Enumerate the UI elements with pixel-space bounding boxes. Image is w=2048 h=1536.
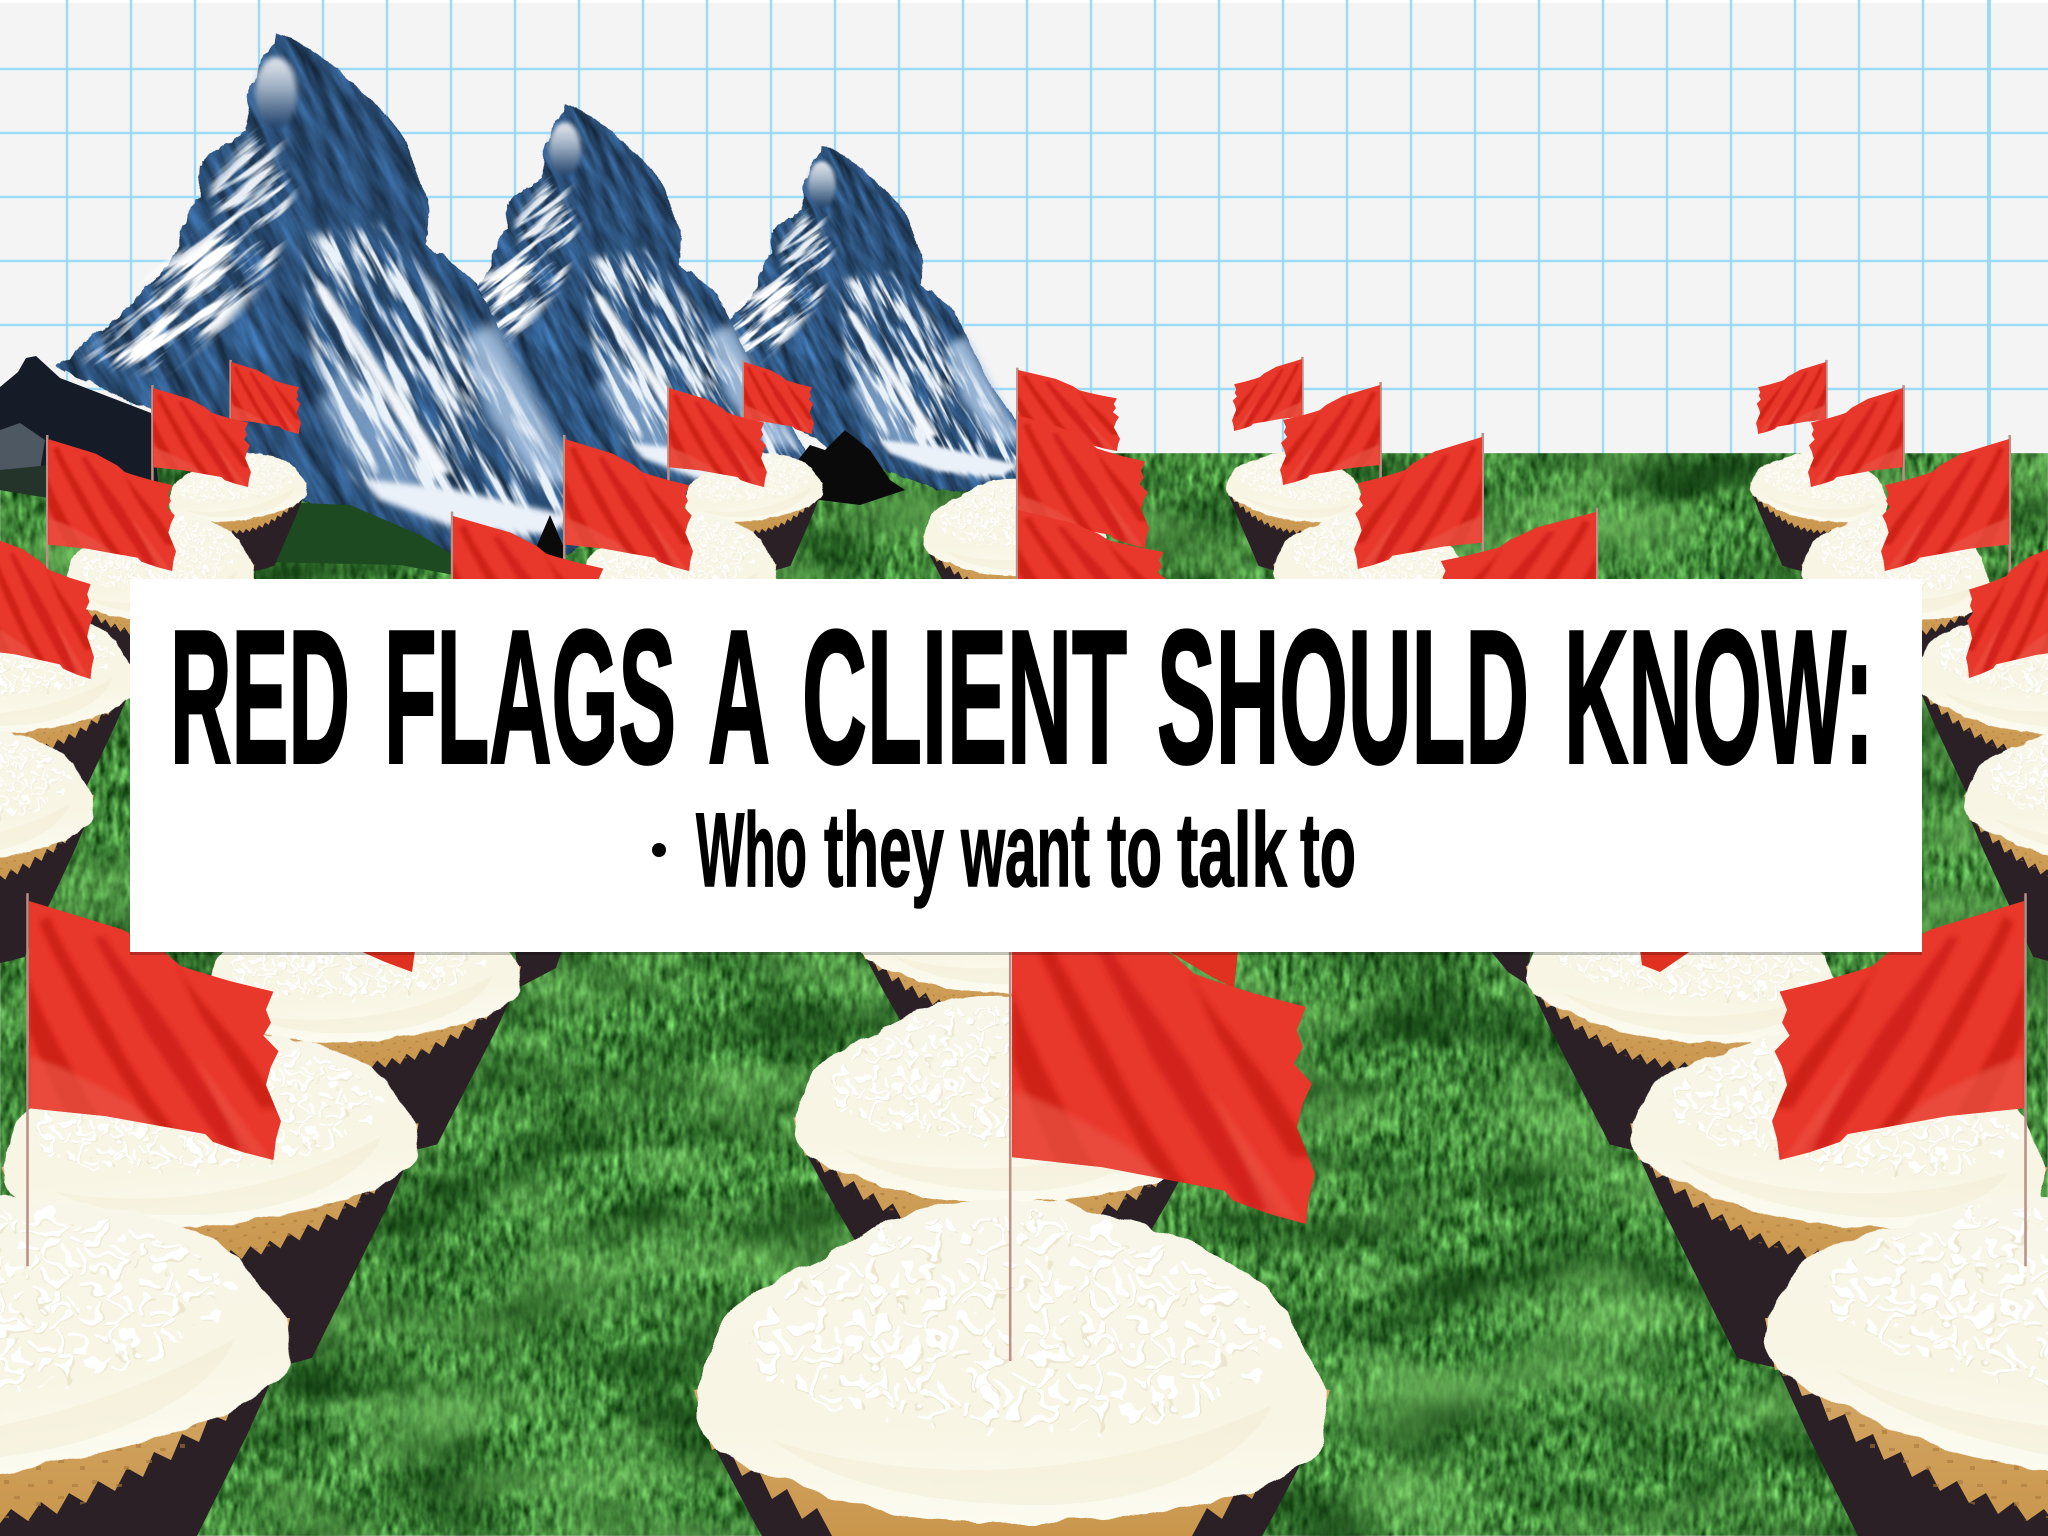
cupcake bbox=[574, 501, 790, 710]
bullet text bbox=[696, 792, 1356, 909]
red flag bbox=[668, 385, 767, 528]
bullet text: want bbox=[960, 792, 1090, 909]
cupcake cake: front bbox=[694, 1350, 1330, 1536]
grass field bbox=[0, 453, 2048, 1536]
red flag bbox=[0, 529, 94, 739]
cupcake bbox=[1739, 443, 1894, 582]
bullet text: they bbox=[824, 792, 944, 909]
heading: A bbox=[708, 592, 770, 804]
cupcake: third bbox=[1511, 879, 1850, 1169]
red flag bbox=[47, 435, 176, 625]
cupcake liner behind the box bbox=[1490, 950, 1530, 985]
flag scrap bbox=[1640, 950, 1692, 972]
red flag: front bbox=[27, 893, 281, 1266]
title panel bbox=[130, 579, 1922, 955]
cupcake base: front bbox=[1765, 1318, 2048, 1536]
cupcake bbox=[1788, 502, 1998, 710]
cupcake bbox=[1215, 443, 1370, 582]
cupcake: second bbox=[0, 1010, 443, 1396]
foreground left column of cupcakes bbox=[0, 879, 562, 1536]
cupcake bbox=[0, 596, 148, 840]
cupcake bbox=[163, 443, 318, 582]
cupcake bbox=[0, 715, 108, 978]
heading: RED bbox=[170, 592, 350, 804]
foreground centre column of cupcakes bbox=[694, 847, 1330, 1536]
cupcake bbox=[1260, 501, 1476, 710]
red flag bbox=[1354, 433, 1483, 623]
cupcake liner: front bbox=[700, 1420, 1324, 1536]
bullet text: to bbox=[1107, 792, 1162, 909]
cupcake: second bbox=[1606, 1010, 2048, 1396]
red flag bbox=[1017, 368, 1120, 484]
mountain: left peak bbox=[0, 0, 831, 788]
cupcakes and flags: back centre group bbox=[923, 368, 1168, 679]
cupcakes and flags: back centre-left group bbox=[452, 360, 834, 728]
cupcake bbox=[1902, 596, 2048, 840]
red flag bbox=[1808, 385, 1904, 528]
heading: SHOULD bbox=[1157, 592, 1529, 804]
heading: FLAGS bbox=[384, 592, 676, 804]
mountain: middle peak bbox=[233, 0, 987, 678]
red flag bbox=[231, 360, 301, 464]
background: graph paper bbox=[0, 0, 2048, 460]
cupcake bbox=[58, 502, 268, 710]
red flag bbox=[744, 360, 814, 464]
red flag bbox=[1966, 538, 2048, 734]
cupcake liner behind the box bbox=[515, 950, 562, 987]
bullet text: talk bbox=[1177, 792, 1287, 909]
cupcakes and flags: back left group bbox=[0, 360, 318, 978]
mountain range bbox=[0, 0, 1188, 788]
cupcake: second bbox=[793, 996, 1207, 1362]
red flag: front bbox=[1772, 893, 2026, 1266]
red flag bbox=[152, 385, 251, 528]
red flag bbox=[1232, 357, 1302, 461]
cupcake frosting: front bbox=[697, 1199, 1328, 1522]
flag scrap bbox=[1167, 950, 1238, 988]
cupcakes and flags: back right group bbox=[1739, 360, 2048, 978]
red flag bbox=[1881, 435, 2010, 625]
cupcake: third bbox=[857, 847, 1143, 1105]
cupcake bbox=[1950, 715, 2048, 978]
cupcake frosting: front bbox=[1752, 1158, 2048, 1517]
red flag bbox=[1017, 506, 1168, 679]
cupcake bbox=[679, 443, 834, 582]
mountain: right peak bbox=[533, 0, 1188, 644]
bullet text: to bbox=[1300, 792, 1356, 909]
cupcakes and flags: back centre-right group bbox=[1215, 357, 1597, 710]
heading: CLIENT bbox=[802, 592, 1127, 804]
dark trees small bbox=[535, 515, 566, 580]
cupcake base: front bbox=[0, 1318, 290, 1536]
flag scrap bbox=[358, 950, 415, 972]
red flag bbox=[1017, 411, 1149, 603]
cupcake bbox=[923, 479, 1107, 651]
red flag bbox=[1756, 360, 1826, 464]
foreground right column of cupcakes bbox=[1490, 879, 2048, 1536]
dark green slope bbox=[258, 503, 470, 578]
red flag bbox=[1280, 382, 1381, 526]
cupcake: third bbox=[197, 879, 536, 1169]
red flag: front bbox=[1010, 880, 1315, 1361]
cupcake frosting: front bbox=[0, 1157, 304, 1517]
dark trees bbox=[790, 430, 905, 505]
dark foreground hill bbox=[0, 356, 160, 498]
bullet bbox=[652, 843, 666, 857]
red flag bbox=[564, 435, 693, 625]
red flag bbox=[1436, 508, 1597, 709]
heading bbox=[170, 592, 1874, 804]
red flag bbox=[452, 512, 608, 728]
bullet text: Who bbox=[696, 792, 807, 909]
